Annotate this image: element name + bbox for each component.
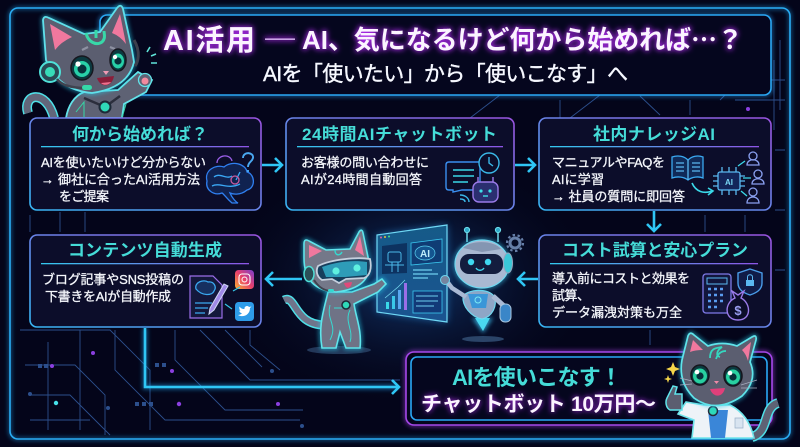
icon: brain and question mark [207, 153, 253, 203]
body text: マニュアルやFAQを [552, 155, 665, 170]
price: チャットボット 10万円〜 [421, 393, 656, 416]
title dash [265, 38, 295, 40]
title continued: AI、気になるけど何から始めれば…？ [302, 20, 743, 57]
card: コスト試算と安心プラン [539, 235, 771, 327]
body text: AIが24時間自動回答 [301, 172, 422, 187]
body text: → [41, 172, 54, 187]
cat: lab coat thumbs up [666, 333, 778, 438]
arrow: to robot [518, 272, 538, 286]
body text [301, 155, 429, 187]
sparkles [664, 362, 680, 383]
card: 社内ナレッジAI [539, 118, 771, 210]
title: AI活用 [163, 24, 255, 57]
body text: 試算、 [552, 288, 590, 303]
icon: book, AI chip and users [672, 152, 764, 203]
icon: chat, clock and robot [446, 153, 499, 202]
icon: calculator, shield and money bag: $ [734, 303, 742, 318]
robot [440, 227, 523, 342]
body text: 下書きをAIが自動作成 [45, 289, 171, 304]
body text [41, 155, 206, 204]
body text [42, 272, 184, 304]
body text: ブログ記事やSNS投稿の [42, 272, 184, 287]
holographic screen [377, 225, 447, 322]
title glow: AI、気になるけど何から始めれば…？ [302, 20, 743, 57]
card: 24時間AIチャットボット [286, 118, 514, 210]
card: 何から始めれば？ [30, 118, 261, 210]
card: コンテンツ自動生成 [30, 235, 261, 327]
icon: book, AI chip and users: AI [725, 178, 733, 187]
price glow: チャットボット 10万円〜 [421, 393, 656, 416]
body text: 導入前にコストと効果を [552, 271, 690, 286]
heading: 24時間AIチャットボット [302, 125, 497, 144]
heading: コンテンツ自動生成 [68, 240, 222, 260]
icon: document and social badges [190, 270, 254, 321]
cat: goggles pointing at screen [284, 230, 386, 354]
arrow [647, 211, 661, 231]
icon: calculator, shield and money bag [703, 269, 762, 320]
arrow: to content card [266, 272, 302, 286]
heading: 何から始めれば？ [72, 125, 208, 144]
body text: をご提案 [59, 189, 109, 204]
body text: AIに学習 [552, 172, 604, 187]
goal heading: AIを使いこなす！ [452, 365, 622, 390]
arrow: content to goal [145, 328, 399, 394]
cat: waving with headset [27, 6, 157, 118]
arrow [262, 158, 282, 172]
body text: お客様の問い合わせに [301, 155, 429, 170]
title glow: AI活用 [163, 24, 255, 57]
body text: 御社に合ったAI活用方法 [58, 172, 200, 187]
body text: AIを使いたいけど分からない [41, 155, 206, 170]
body text [552, 271, 690, 320]
goal panel [406, 352, 772, 425]
body text: → 社員の質問に即回答 [552, 189, 685, 204]
arrow [515, 158, 535, 172]
heading: コスト試算と安心プラン [562, 240, 748, 260]
subtitle: AIを「使いたい」から「使いこなす」へ [263, 63, 628, 86]
body text [552, 155, 685, 204]
body text: データ漏洩対策も万全 [552, 305, 682, 320]
title panel [100, 15, 771, 95]
holographic screen: AI [420, 249, 430, 260]
heading: 社内ナレッジAI [593, 125, 715, 144]
